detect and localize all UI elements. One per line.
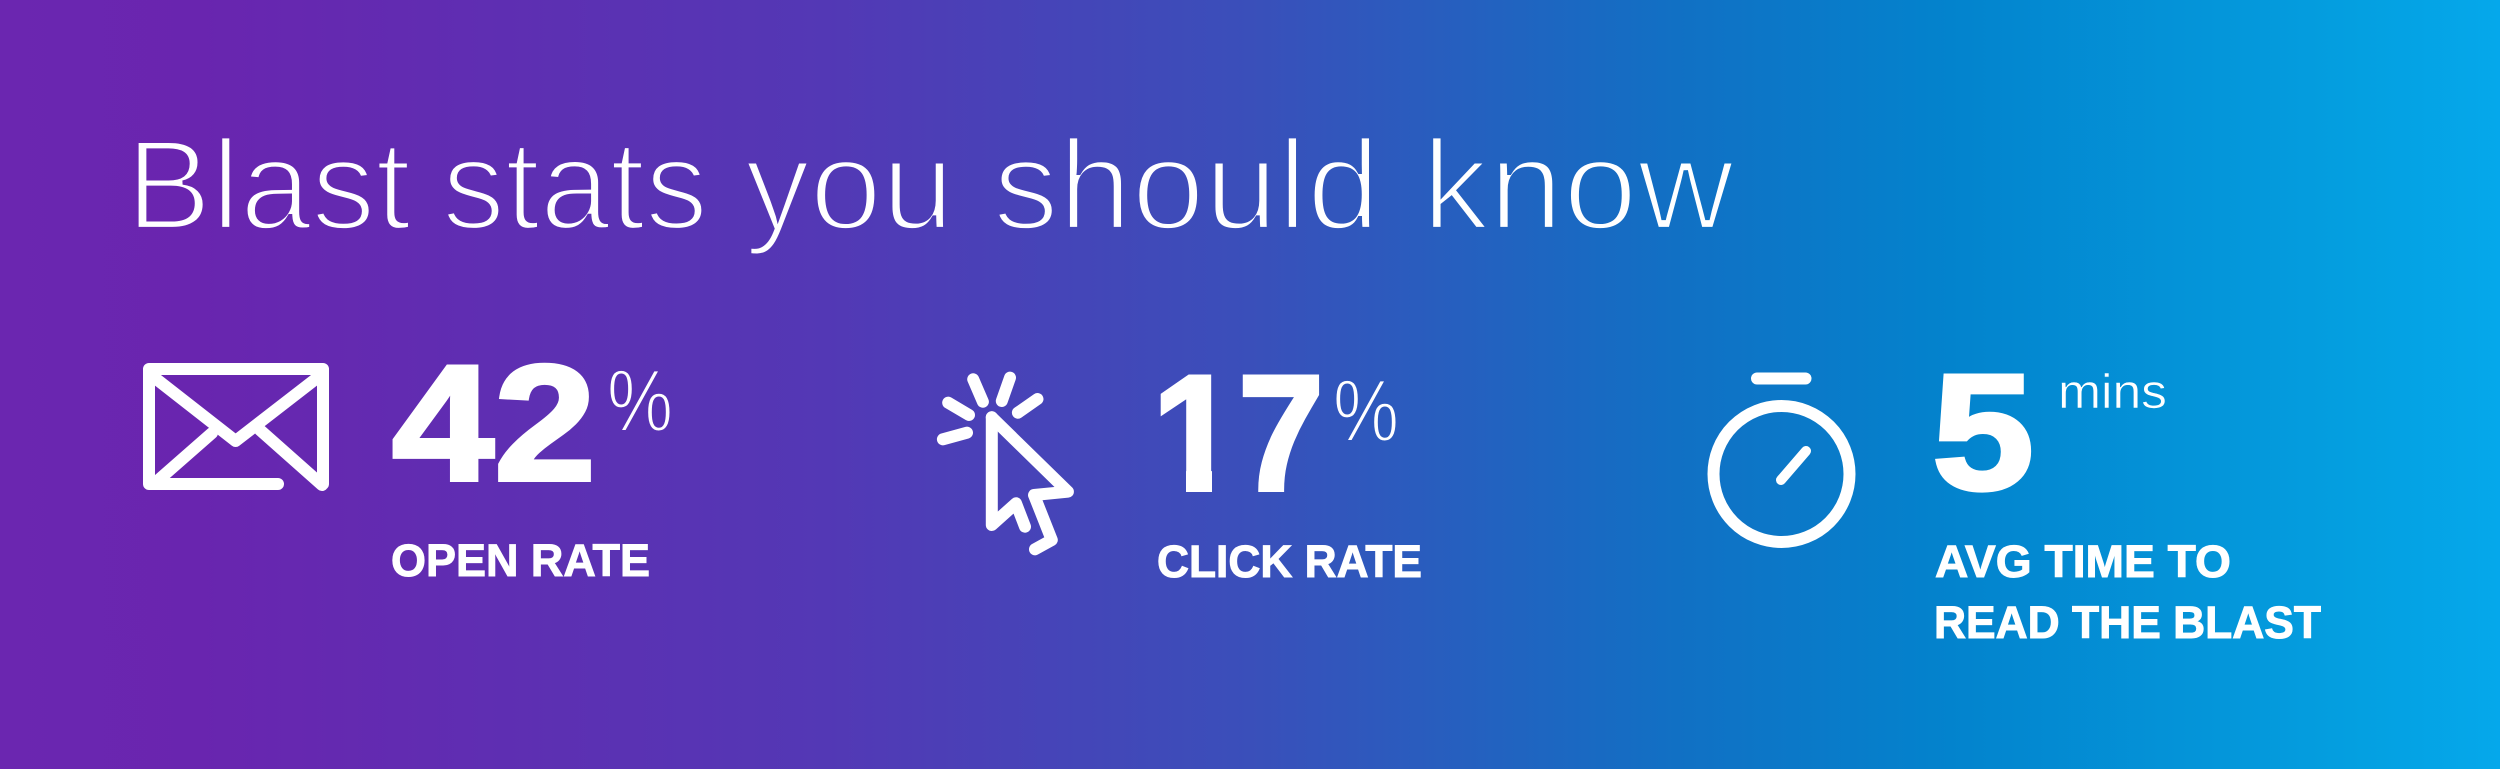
title: should — [993, 114, 1380, 257]
stat: average read time — [1714, 340, 2321, 648]
read time value: 5 — [1932, 340, 2034, 524]
title: Blast — [126, 114, 411, 257]
mins unit: mins — [2058, 366, 2167, 419]
icon: envelope — [149, 369, 323, 485]
icon: cursor click — [943, 378, 1068, 549]
percent sign: % — [607, 351, 673, 450]
click rate label: CLICK RATE — [1157, 536, 1422, 587]
icon: stopwatch — [1714, 378, 1850, 542]
title: know — [1422, 114, 1735, 257]
read time label — [1934, 536, 2321, 648]
open rate value: 42 — [392, 331, 596, 515]
title — [126, 114, 1735, 257]
read time label: AVG TIME TO — [1935, 536, 2231, 587]
read time label: READ THE BLAST — [1934, 597, 2321, 648]
open rate label: OPEN RATE — [391, 535, 650, 586]
stat: click rate — [936, 372, 1421, 578]
title: you — [745, 114, 954, 257]
percent sign: % — [1333, 361, 1399, 460]
stat: open rate — [149, 331, 673, 586]
title: stats — [442, 114, 708, 257]
click rate value: 17 — [1152, 341, 1324, 525]
